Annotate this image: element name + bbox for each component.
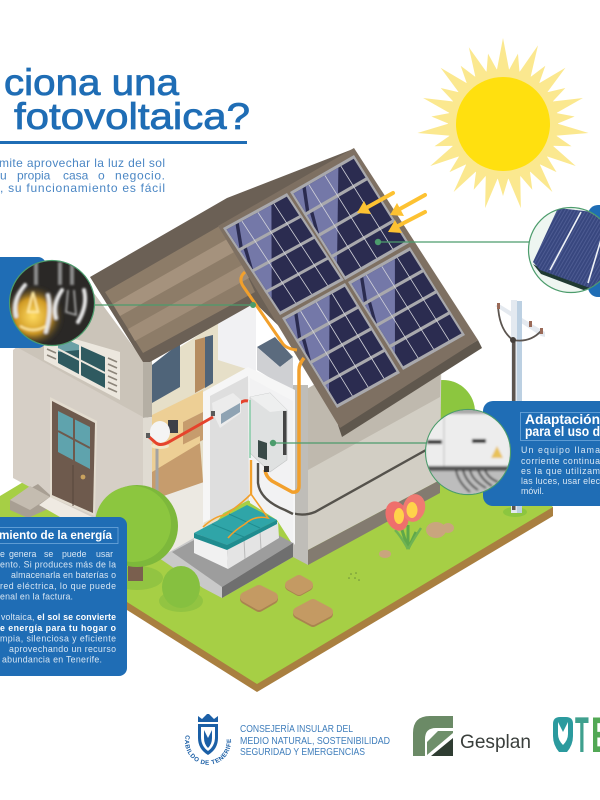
panel: inverter adaptation: Un equipo llama (521, 445, 600, 455)
panel: consumption (0, 257, 46, 348)
panel: inverter adaptation: Adaptación (525, 412, 600, 427)
left tree (95, 485, 178, 590)
logo text: Consejería (240, 722, 390, 758)
grass tufts (348, 572, 360, 581)
panel: inverter adaptation (483, 401, 600, 506)
panel: energy storage: abundancia en Tenerife. (2, 654, 102, 664)
lamp connector line (94, 302, 256, 308)
photo: light bulbs (1, 260, 94, 348)
electric pole (495, 300, 545, 517)
intro text (0, 156, 165, 195)
solar panels (223, 155, 465, 408)
logo: Tenerife (553, 707, 600, 764)
roof frame (218, 148, 482, 437)
intro text: mite aprovechar la luz del sol (0, 156, 165, 170)
panel: energy storage: genera (9, 549, 36, 559)
title: ciona una (4, 62, 179, 103)
panel: energy storage: se (44, 549, 53, 559)
panel: energy storage: aprovechando un recurso (9, 644, 116, 654)
photo: solar cell (528, 208, 600, 300)
inverter to battery cables (250, 400, 251, 494)
panel: energy storage: puede (62, 549, 87, 559)
house interior (150, 298, 293, 556)
intro text: o (98, 168, 105, 182)
rocks (379, 522, 454, 558)
breaker box (146, 393, 241, 438)
panel: energy storage: enal en la factura. (0, 592, 73, 602)
photo: inverter (426, 408, 510, 495)
logo text: Consejería: MEDIO NATURAL, SOSTENIBILIDAD (240, 736, 390, 747)
panel: solar cell (588, 205, 600, 297)
ground (0, 455, 553, 692)
panel: energy storage: almacenarla en baterías o (11, 570, 116, 580)
panel: inverter adaptation: corriente continua (521, 456, 600, 466)
logo: Gesplan (413, 716, 531, 756)
intro text: negocio. (115, 168, 165, 182)
back shrub (411, 380, 475, 444)
entrance steps (10, 484, 92, 518)
bush (159, 566, 203, 612)
sun (417, 38, 589, 209)
panel: inverter adaptation: es la que utilizam (521, 466, 600, 476)
batteries (194, 494, 279, 569)
intro text: casa (63, 168, 89, 182)
panel: energy storage: e (0, 549, 5, 559)
intro text: u (0, 168, 7, 182)
flowers (382, 492, 428, 549)
dark grid cable (258, 450, 426, 515)
title (0, 62, 250, 144)
logo: Gesplan: Gesplan (460, 731, 531, 753)
thick orange cable (265, 358, 304, 492)
inverter (250, 393, 287, 472)
panel: energy storage: voltaica, el sol se convierte (1, 612, 116, 622)
panel: energy storage: red eléctrica, lo que puede (0, 581, 116, 591)
window (44, 330, 120, 400)
red cable (148, 401, 248, 444)
panel: energy storage (0, 517, 127, 676)
cable from panels (241, 272, 297, 350)
logo: Tenerife: T (575, 708, 589, 764)
door (50, 397, 97, 516)
roof left plane (90, 149, 353, 362)
solar connector line (375, 239, 530, 245)
panel: energy storage: miento de la energía (0, 529, 113, 542)
logo text: Consejería: CONSEJERÍA INSULAR DEL (240, 722, 353, 735)
panel: inverter adaptation: las luces, usar elec (521, 476, 600, 486)
intro text: propia (17, 168, 51, 182)
logo text: Consejería: SEGURIDAD Y EMERGENCIAS (240, 747, 365, 758)
front wall (13, 285, 152, 560)
panel: energy storage: ento. Si produces más de la (0, 560, 116, 570)
intro text: , su funcionamiento es fácil (0, 181, 165, 195)
panel: energy storage: mpia, silenciosa y eficiente (0, 634, 116, 644)
sunlight arrows (357, 193, 425, 233)
stepping stones (245, 580, 328, 622)
logo: Cabildo de Tenerife: CABILDO DE TENERIFE (184, 736, 232, 765)
right wall (293, 310, 442, 565)
logo: Cabildo de Tenerife (184, 714, 232, 765)
dark grid cable front (258, 463, 293, 514)
platform (159, 515, 293, 598)
panel: energy storage: usar (96, 549, 113, 559)
panel: inverter adaptation: móvil. (521, 486, 544, 496)
inverter connector line (270, 440, 430, 446)
utility wall (203, 367, 295, 545)
panel: energy storage: e energía para tu hogar o (0, 623, 117, 633)
title: fotovoltaica? (14, 96, 250, 137)
